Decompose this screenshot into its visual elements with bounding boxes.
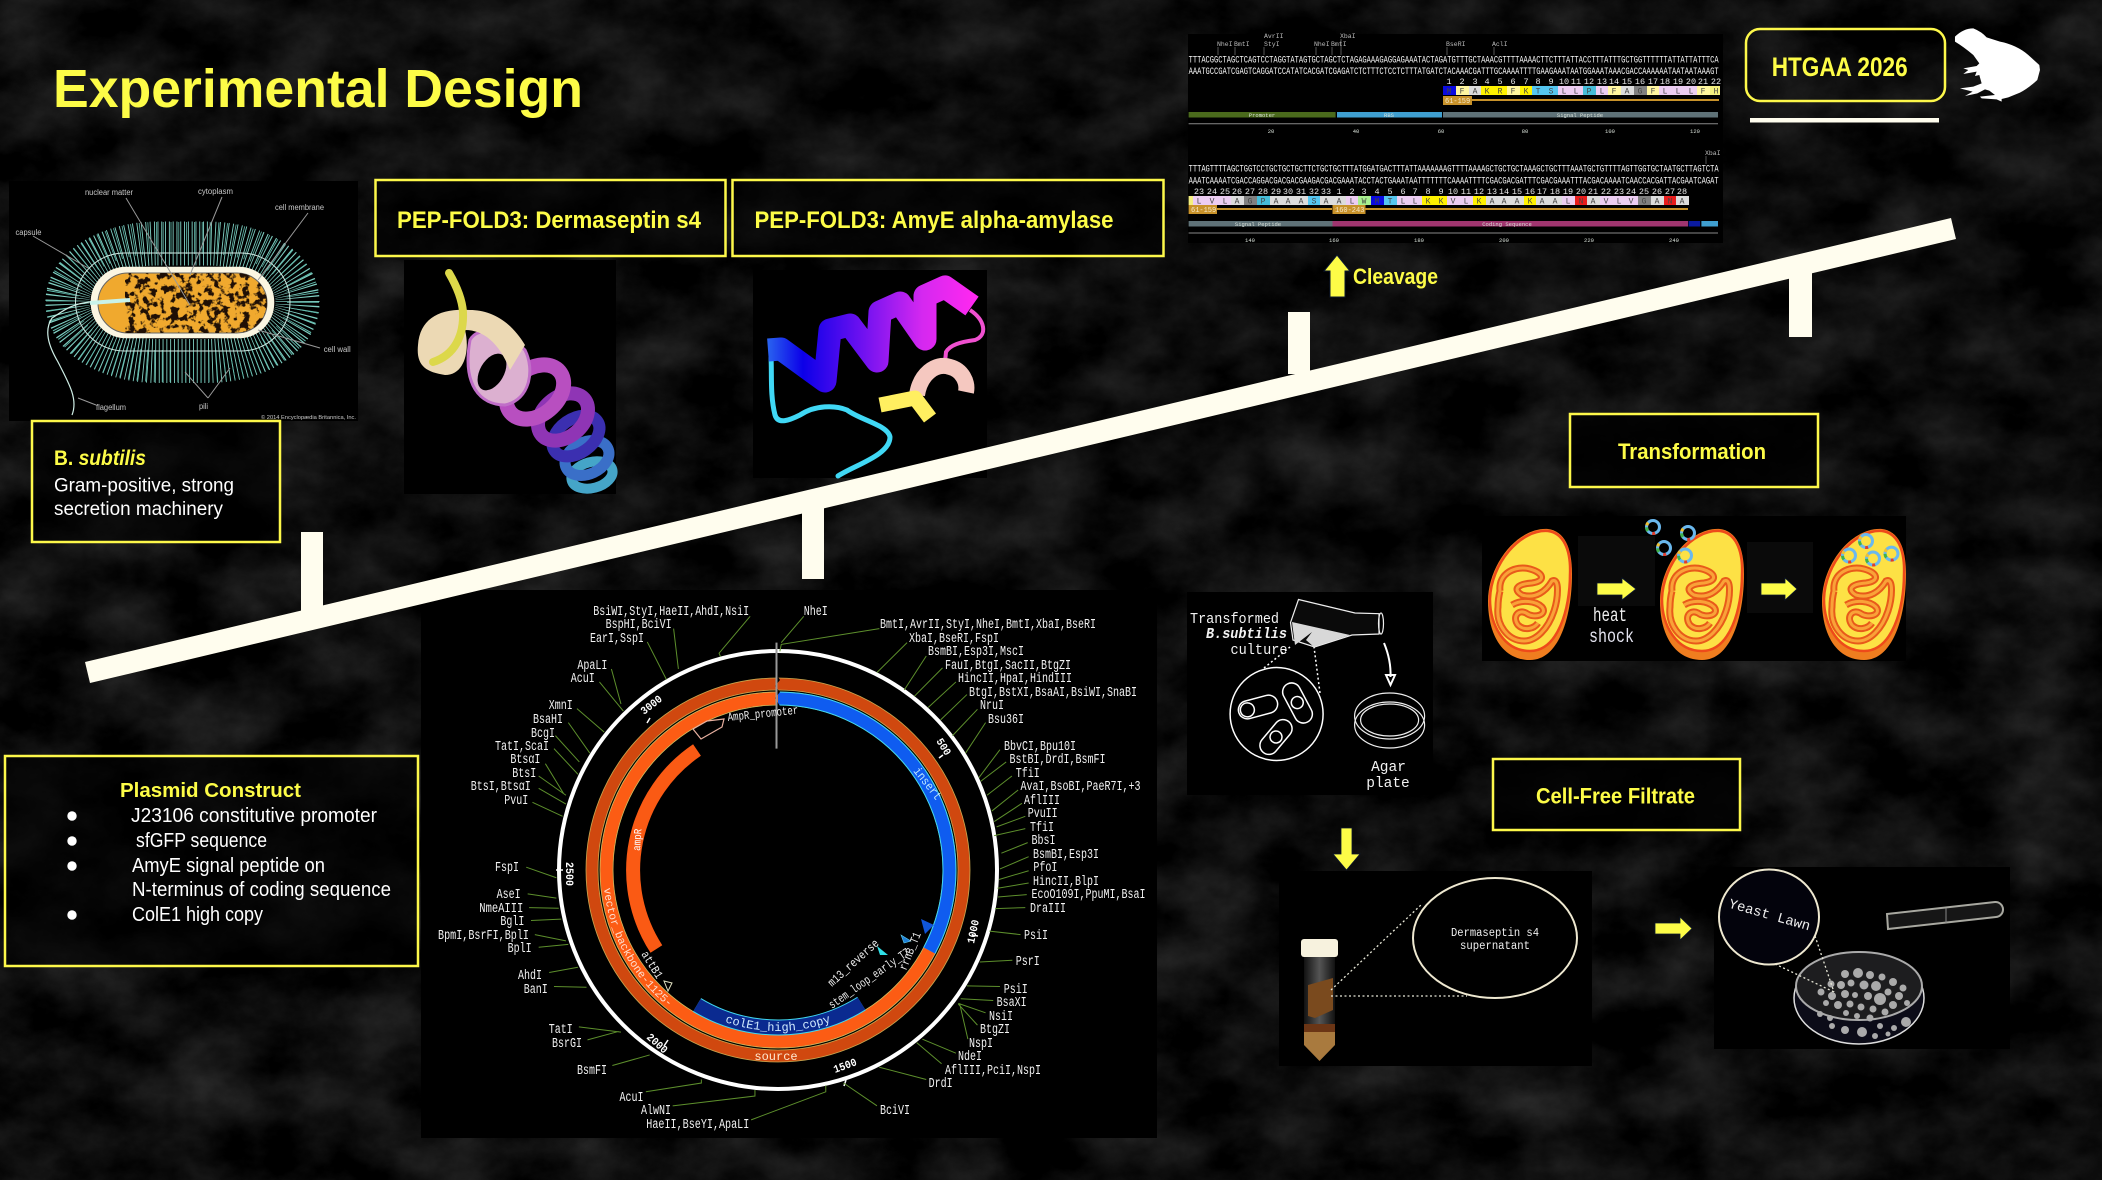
residue numbers: 10	[1559, 77, 1569, 87]
title: Experimental Design	[53, 59, 583, 119]
rulers: 140	[1245, 237, 1255, 244]
residue numbers: 16	[1525, 187, 1535, 197]
feature labels: stem_loop_early_T7	[826, 946, 913, 1012]
residue numbers: 29	[1271, 187, 1281, 197]
ring gaps at origin	[775, 643, 780, 749]
scale ticks: 1500	[832, 1057, 859, 1077]
amino acid chips row 1: MFAKRFKTSLLPLFAGFLLLFH	[1447, 88, 1719, 96]
restriction site labels: left: BcgI	[531, 727, 555, 742]
residue numbers: 6	[1510, 77, 1516, 87]
residue numbers: 18	[1660, 77, 1670, 87]
restriction site labels: left: FspI	[495, 861, 519, 876]
outer source ring	[586, 678, 970, 1062]
yeast callout: Yeast Lawn	[1727, 897, 1812, 935]
enzyme sites row 1: NheI	[1314, 41, 1330, 48]
icon: frog	[1955, 28, 2040, 102]
restriction site labels: left: BsmFI	[577, 1064, 607, 1079]
residue numbers: 28	[1677, 187, 1687, 197]
residue numbers: 14	[1499, 187, 1509, 197]
restriction site labels: left: BspHI,BciVI	[606, 618, 672, 633]
residue numbers: 12	[1474, 187, 1484, 197]
residue numbers: 26	[1232, 187, 1242, 197]
restriction site labels: left: BsrGI	[552, 1037, 582, 1052]
feature labels: rrnB_T1	[897, 930, 925, 972]
restriction site labels: right: PsiI	[1024, 929, 1048, 944]
panel: plasmid construct: sfGFP sequence	[136, 830, 267, 852]
scale ticks: 3000	[639, 694, 665, 718]
restriction site labels: left: BanI	[524, 983, 548, 998]
restriction site labels: left: AlwNI	[641, 1104, 671, 1119]
feature tracks: Promoter	[1249, 112, 1275, 119]
panel: AmyE ribbon structure	[753, 270, 987, 478]
residue numbers: 27	[1665, 187, 1675, 197]
CDS range labels: 160-243	[1335, 207, 1364, 215]
residue numbers: 11	[1571, 77, 1581, 87]
restriction site labels: right	[804, 605, 1146, 1119]
residue numbers: 26	[1652, 187, 1662, 197]
enzyme sites row 1: XbaI	[1340, 33, 1356, 40]
flask	[1290, 600, 1384, 647]
restriction site labels: right: Bsu36I	[988, 713, 1024, 728]
feature labels: m13_reverse	[825, 937, 882, 990]
feature labels: vector_backbone-1125-3346	[604, 888, 670, 1004]
CDS range labels: 61-159	[1445, 98, 1470, 106]
residue numbers: 1	[1446, 77, 1452, 87]
feature labels: source	[754, 1050, 798, 1064]
enzyme sites row 1: BseRI	[1446, 41, 1466, 48]
residue numbers: 3	[1472, 77, 1478, 87]
heading: PEP-FOLD3 Dermaseptin	[376, 180, 726, 256]
residue numbers: 13	[1487, 187, 1497, 197]
feature labels	[112, 452, 978, 1104]
rulers: 220	[1584, 237, 1594, 244]
rulers: 40	[1353, 128, 1359, 135]
arrow and heat shock label: heat	[1593, 605, 1627, 627]
enzyme sites row 1	[1217, 33, 1721, 164]
restriction site labels: left: BtsI,BtsαI	[471, 780, 531, 795]
restriction site labels: right: NspI	[969, 1037, 993, 1052]
enzyme sites row 1: BmtI	[1234, 41, 1250, 48]
arrow	[1747, 542, 1813, 613]
restriction site labels: left: EarI,SspI	[590, 632, 644, 647]
rulers: 100	[1605, 128, 1615, 135]
feature labels: attB1	[638, 949, 665, 982]
enzyme sites row 1: StyI	[1264, 41, 1280, 48]
restriction site labels: right: BsmBI,Esp3I,MscI	[928, 645, 1024, 660]
restriction site labels: left: AseI	[497, 888, 521, 903]
restriction site labels: right: BsaXI	[997, 996, 1027, 1011]
residue numbers: 8	[1425, 187, 1431, 197]
restriction site labels: right: AflIII,PciI,NspI	[945, 1064, 1041, 1079]
restriction site labels: right: PfoI	[1033, 861, 1057, 876]
heading: PEP-FOLD3 AmyE: PEP-FOLD3: AmyE alpha-amylase	[754, 207, 1114, 234]
residue numbers: 2	[1349, 187, 1355, 197]
heading: Transformation	[1570, 414, 1818, 487]
restriction site labels: right: BsmBI,Esp3I	[1033, 848, 1099, 863]
test tube	[1887, 902, 2003, 929]
dotted zoom lines	[1331, 904, 1467, 996]
scale ticks: 2000	[643, 1032, 669, 1057]
DNA strands: TTTACGGCTAGCTCAGTCCTAGGTATAGTGCTAGCTCTAGAGAAAGAGGAGAAATACTAGATGTTTGCTAAACGTTTTAAAACTTCTTTATTACCTTTATTTGCTGGTTTTTTATTATTATTTCA	[1189, 56, 1719, 66]
residue numbers: 32	[1309, 187, 1319, 197]
leader lines	[526, 616, 1029, 1120]
residue numbers: 31	[1296, 187, 1306, 197]
enzyme sites row 1: AclI	[1492, 41, 1508, 48]
restriction site labels: right: PsiI	[1004, 983, 1028, 998]
residue numbers: 22	[1711, 77, 1721, 87]
restriction site labels: right: BstBI,DrdI,BsmFI	[1010, 753, 1106, 768]
restriction site labels: right: BtgI,BstXI,BsaAI,BsiWI,SnaBI	[969, 686, 1137, 701]
rulers: 160	[1329, 237, 1339, 244]
DNA strands: TTTAGTTTTAGCTGGTCCTGCTGCTGCTTCTGCTGCTTTATGGATGACTTTATTAAAAAAAGTTTTAAAAGCTGCTGCTAAAGCTGCTTTAAATGCTGTTTTAGTTGGTGCTAATGCTTAGTCTA	[1189, 164, 1719, 176]
residue numbers: 14	[1609, 77, 1619, 87]
restriction site labels: right: TfiI	[1030, 821, 1054, 836]
feature tracks: RBS	[1384, 112, 1395, 119]
heading: PEP-FOLD3 AmyE	[732, 180, 1164, 256]
residue numbers: 24	[1207, 187, 1217, 197]
panel: bacterium diagram	[9, 181, 358, 421]
heading: HTGAA 2026	[1746, 29, 1945, 101]
restriction site labels: left: BplI	[508, 942, 532, 957]
restriction site labels: left	[438, 605, 749, 1133]
petri dish	[1794, 952, 1924, 1044]
restriction site labels: left: AcuI	[620, 1091, 644, 1106]
restriction site labels: right: XbaI,BseRI,FspI	[909, 632, 999, 647]
feature tracks: Signal Peptide	[1557, 112, 1603, 119]
residue numbers: 28	[1258, 187, 1268, 197]
rulers: 180	[1414, 237, 1424, 244]
panel: bacterium diagram: cytoplasm	[198, 187, 233, 196]
scale ticks	[556, 694, 983, 1086]
restriction site labels: right: NsiI	[989, 1010, 1013, 1025]
residue numbers: 17	[1537, 187, 1547, 197]
DNA strands: AAATCAAAATCGACCAGGACGACGACGAAGACGACGAAATACCTACTGAAATAATTTTTTTCAAAATTTTCGACGACGATTTCGACGAAATTTACGACAAAATCAACCACGATTACGAATCAGAT	[1189, 176, 1719, 188]
residue numbers: 8	[1535, 77, 1541, 87]
ampR arc	[633, 750, 697, 949]
restriction site labels: left: BtsαI	[510, 753, 540, 768]
rulers: 200	[1499, 237, 1509, 244]
timeline bar	[85, 218, 1956, 683]
rulers: 240	[1669, 237, 1679, 244]
conical tube	[1301, 939, 1338, 1061]
residue numbers: 15	[1622, 77, 1632, 87]
residue numbers: 23	[1194, 187, 1204, 197]
panel: bacterium diagram: cell membrane	[275, 203, 325, 212]
residue numbers: 13	[1597, 77, 1607, 87]
residue numbers: 10	[1448, 187, 1458, 197]
dotted zoom lines	[1775, 936, 1834, 992]
feature markers	[664, 719, 934, 991]
heading: Cell-Free Filtrate	[1493, 759, 1740, 830]
restriction site labels: right: NruI	[980, 699, 1004, 714]
panel: annotated DNA sequence	[1188, 33, 1723, 244]
restriction site labels: left: PvuI	[504, 794, 528, 809]
residue numbers: 11	[1461, 187, 1471, 197]
enzyme sites row 1: NheI	[1217, 41, 1233, 48]
residue numbers: 23	[1614, 187, 1624, 197]
panel: plasmid construct: ColE1 high copy	[132, 904, 263, 926]
chart: plasmid map	[421, 590, 1157, 1138]
restriction site labels: right: AvaI,BsoBI,PaeR7I,+3	[1020, 780, 1140, 795]
culture label: B.subtilis	[1206, 627, 1287, 643]
feature tracks: Signal Peptide	[1235, 221, 1281, 228]
restriction site labels: right: BmtI,AvrII,StyI,NheI,BmtI,XbaI,BseRI	[880, 618, 1096, 633]
panel: B. subtilis: secretion machinery	[54, 498, 223, 520]
heading: Cell-Free Filtrate: Cell-Free Filtrate	[1536, 784, 1695, 808]
restriction site labels: left: TatI	[549, 1023, 573, 1038]
residue numbers: 24	[1626, 187, 1636, 197]
restriction site labels: right: PvuII	[1028, 807, 1058, 822]
rulers	[1189, 124, 1718, 244]
arrow: right	[1655, 917, 1692, 940]
restriction site labels: left: NmeAIII	[479, 902, 523, 917]
curved arrow	[1384, 643, 1395, 685]
enzyme sites row 1: XbaI	[1705, 150, 1721, 157]
restriction site labels: right: FauI,BtgI,SacII,BtgZI	[945, 659, 1071, 674]
panel: plasmid construct: J23106 constitutive promoter	[131, 805, 377, 827]
restriction site labels: left: TatI,ScaI	[495, 740, 549, 755]
residue numbers: 20	[1576, 187, 1586, 197]
residue numbers: 2	[1459, 77, 1465, 87]
restriction site labels: left: BpmI,BsrFI,BplI	[438, 929, 529, 944]
panel: yeast lawn plate	[1714, 867, 2010, 1049]
DNA strands	[1189, 56, 1719, 188]
restriction site labels: right: BbvCI,Bpu10I	[1004, 740, 1076, 755]
rulers: 20	[1268, 128, 1274, 135]
restriction site labels: left: XmnI	[549, 699, 573, 714]
restriction site labels: right: DrdI	[929, 1077, 953, 1092]
residue numbers: 5	[1387, 187, 1393, 197]
supernatant callout	[1413, 878, 1577, 998]
restriction site labels: left: ApaLI	[577, 659, 607, 674]
rulers: 60	[1438, 128, 1444, 135]
vector backbone ring	[600, 692, 956, 1048]
restriction site labels: left: HaeII,BseYI,ApaLI	[646, 1118, 749, 1133]
residue numbers: 15	[1512, 187, 1522, 197]
scale ticks: 2500	[562, 862, 574, 886]
restriction site labels: right: DraIII	[1030, 902, 1066, 917]
panel: bacterium diagram: cell wall	[324, 345, 351, 354]
yeast callout	[1719, 870, 1819, 964]
agar dish	[1355, 693, 1425, 748]
culture label	[1190, 612, 1288, 659]
residue numbers: 7	[1412, 187, 1418, 197]
restriction site labels: right: AflIII	[1024, 794, 1060, 809]
residue numbers: 9	[1548, 77, 1554, 87]
heading: Transformation: Transformation	[1618, 439, 1766, 464]
culture label: culture	[1230, 643, 1288, 659]
feature labels: insert	[910, 765, 944, 803]
residue numbers: 4	[1484, 77, 1490, 87]
restriction site labels: right: NheI	[804, 605, 828, 620]
CDS range labels: 61-159	[1191, 207, 1216, 215]
culture label: Transformed	[1190, 612, 1279, 628]
residue numbers: 16	[1635, 77, 1645, 87]
DNA strands: AAATGCCGATCGAGTCAGGATCCATATCACGATCGAGATCTCTTTCTCCTCTTTATGATCTACAAACGATTTGCAAAATTTTGAAGAAATAATGGAAATAAACGACCAAAAAATAATAATAAAGT	[1189, 67, 1719, 78]
amino acid chips row 2: LVLAGPAAASAALWMTLLKKVLKAAAKAALNAVLVGANA	[1197, 198, 1685, 206]
restriction site labels: right: BciVI	[880, 1104, 910, 1119]
residue numbers: 6	[1400, 187, 1406, 197]
feature tracks: Coding Sequence	[1482, 221, 1532, 228]
panel: bacterium diagram: pili	[199, 402, 208, 411]
panel: bacterium diagram: capsule	[16, 228, 42, 237]
residue numbers: 18	[1550, 187, 1560, 197]
panel: plasmid construct	[5, 756, 418, 966]
agar label	[1366, 760, 1410, 792]
residue numbers: 1	[1336, 187, 1342, 197]
CDS range labels	[1189, 96, 1719, 215]
residue numbers: 30	[1283, 187, 1293, 197]
residue numbers: 33	[1321, 187, 1331, 197]
panel: agar plating	[1187, 592, 1433, 795]
restriction site labels: left: BsaHI	[533, 713, 563, 728]
feature labels: ampR	[632, 828, 646, 851]
panel: plasmid construct: AmyE signal peptide on	[132, 855, 325, 877]
panel: B. subtilis: B. subtilis	[54, 447, 146, 470]
restriction site labels: left: AcuI	[571, 672, 595, 687]
residue numbers: 4	[1374, 187, 1380, 197]
panel: B. subtilis	[32, 421, 280, 542]
residue numbers	[1194, 77, 1721, 197]
rulers: 120	[1690, 128, 1700, 135]
restriction site labels: right: BtgZI	[980, 1023, 1010, 1038]
heading: PEP-FOLD3 Dermaseptin: PEP-FOLD3: Dermaseptin s4	[397, 207, 702, 234]
residue numbers: 21	[1588, 187, 1598, 197]
panel: supernatant tube	[1279, 871, 1592, 1066]
panel: transformation cells	[1482, 516, 1906, 661]
scale ticks: 1000	[966, 919, 983, 945]
residue numbers: 19	[1673, 77, 1683, 87]
restriction site labels: right: BbsI	[1032, 834, 1056, 849]
backbone circle	[559, 651, 997, 1089]
restriction site labels: right: TfiI	[1016, 767, 1040, 782]
rulers: 80	[1522, 128, 1528, 135]
residue numbers: 20	[1686, 77, 1696, 87]
panel: bacterium diagram: © 2014 Encyclopædia Britannica, Inc.	[261, 414, 356, 421]
feature labels: colE1_high_copy	[726, 1016, 829, 1034]
magnified bacteria	[1230, 647, 1323, 760]
scale ticks: 500	[933, 737, 952, 758]
feature tracks	[1189, 112, 1718, 228]
restriction site labels: left: BtsI	[512, 767, 536, 782]
residue numbers: 5	[1497, 77, 1503, 87]
agar label: plate	[1366, 776, 1410, 792]
insert arc	[778, 698, 949, 950]
panel: bacterium diagram: flagellum	[96, 403, 126, 412]
restriction site labels: right: EcoO109I,PpuMI,BsaI	[1032, 888, 1146, 903]
arrow and heat shock label	[1578, 536, 1655, 648]
agar label: Agar	[1371, 760, 1406, 776]
arrow and heat shock label: shock	[1589, 626, 1634, 648]
residue numbers: 25	[1639, 187, 1649, 197]
panel: plasmid construct: N-terminus of coding sequence	[132, 879, 391, 901]
restriction site labels: right: HincII,BlpI	[1033, 875, 1099, 890]
restriction site labels: right: NdeI	[958, 1050, 982, 1065]
underline	[1750, 118, 1939, 122]
label: Cleavage: Cleavage	[1353, 264, 1438, 289]
restriction site labels: left: BsiWI,StyI,HaeII,AhdI,NsiI	[593, 605, 749, 620]
panel: B. subtilis: Gram-positive, strong	[54, 474, 234, 496]
cell 2 with entering plasmids	[1646, 520, 1744, 660]
enzyme sites row 1: BmtI	[1331, 41, 1347, 48]
residue numbers: 22	[1601, 187, 1611, 197]
enzyme sites row 1: AvrII	[1264, 33, 1284, 40]
cell 1	[1488, 529, 1572, 660]
restriction site labels: right: HincII,HpaI,HindIII	[958, 672, 1072, 687]
residue numbers: 27	[1245, 187, 1255, 197]
cell 3 with plasmids	[1822, 529, 1906, 660]
residue numbers: 21	[1698, 77, 1708, 87]
residue numbers: 17	[1648, 77, 1658, 87]
restriction site labels: left: BglI	[500, 915, 524, 930]
residue numbers: 19	[1563, 187, 1573, 197]
panel: bacterium diagram: nuclear matter	[85, 188, 133, 197]
arrow: down	[1333, 828, 1360, 870]
restriction site labels: left: AhdI	[518, 969, 542, 984]
supernatant callout: supernatant	[1460, 940, 1530, 953]
panel: Dermaseptin helix structure	[404, 260, 616, 494]
residue numbers: 7	[1523, 77, 1529, 87]
heading: HTGAA 2026: HTGAA 2026	[1772, 52, 1908, 82]
arrow: cleavage	[1324, 255, 1350, 297]
residue numbers: 3	[1361, 187, 1367, 197]
feature labels: AmpR_promoter	[727, 704, 799, 725]
panel: plasmid construct: Plasmid Construct	[120, 780, 301, 802]
residue numbers: 9	[1438, 187, 1444, 197]
residue numbers: 12	[1584, 77, 1594, 87]
colE1 arc	[697, 1004, 862, 1027]
supernatant callout: Dermaseptin s4	[1451, 927, 1539, 940]
yeast colonies	[1817, 968, 1911, 1039]
restriction site labels: right: PsrI	[1016, 955, 1040, 970]
residue numbers: 25	[1220, 187, 1230, 197]
